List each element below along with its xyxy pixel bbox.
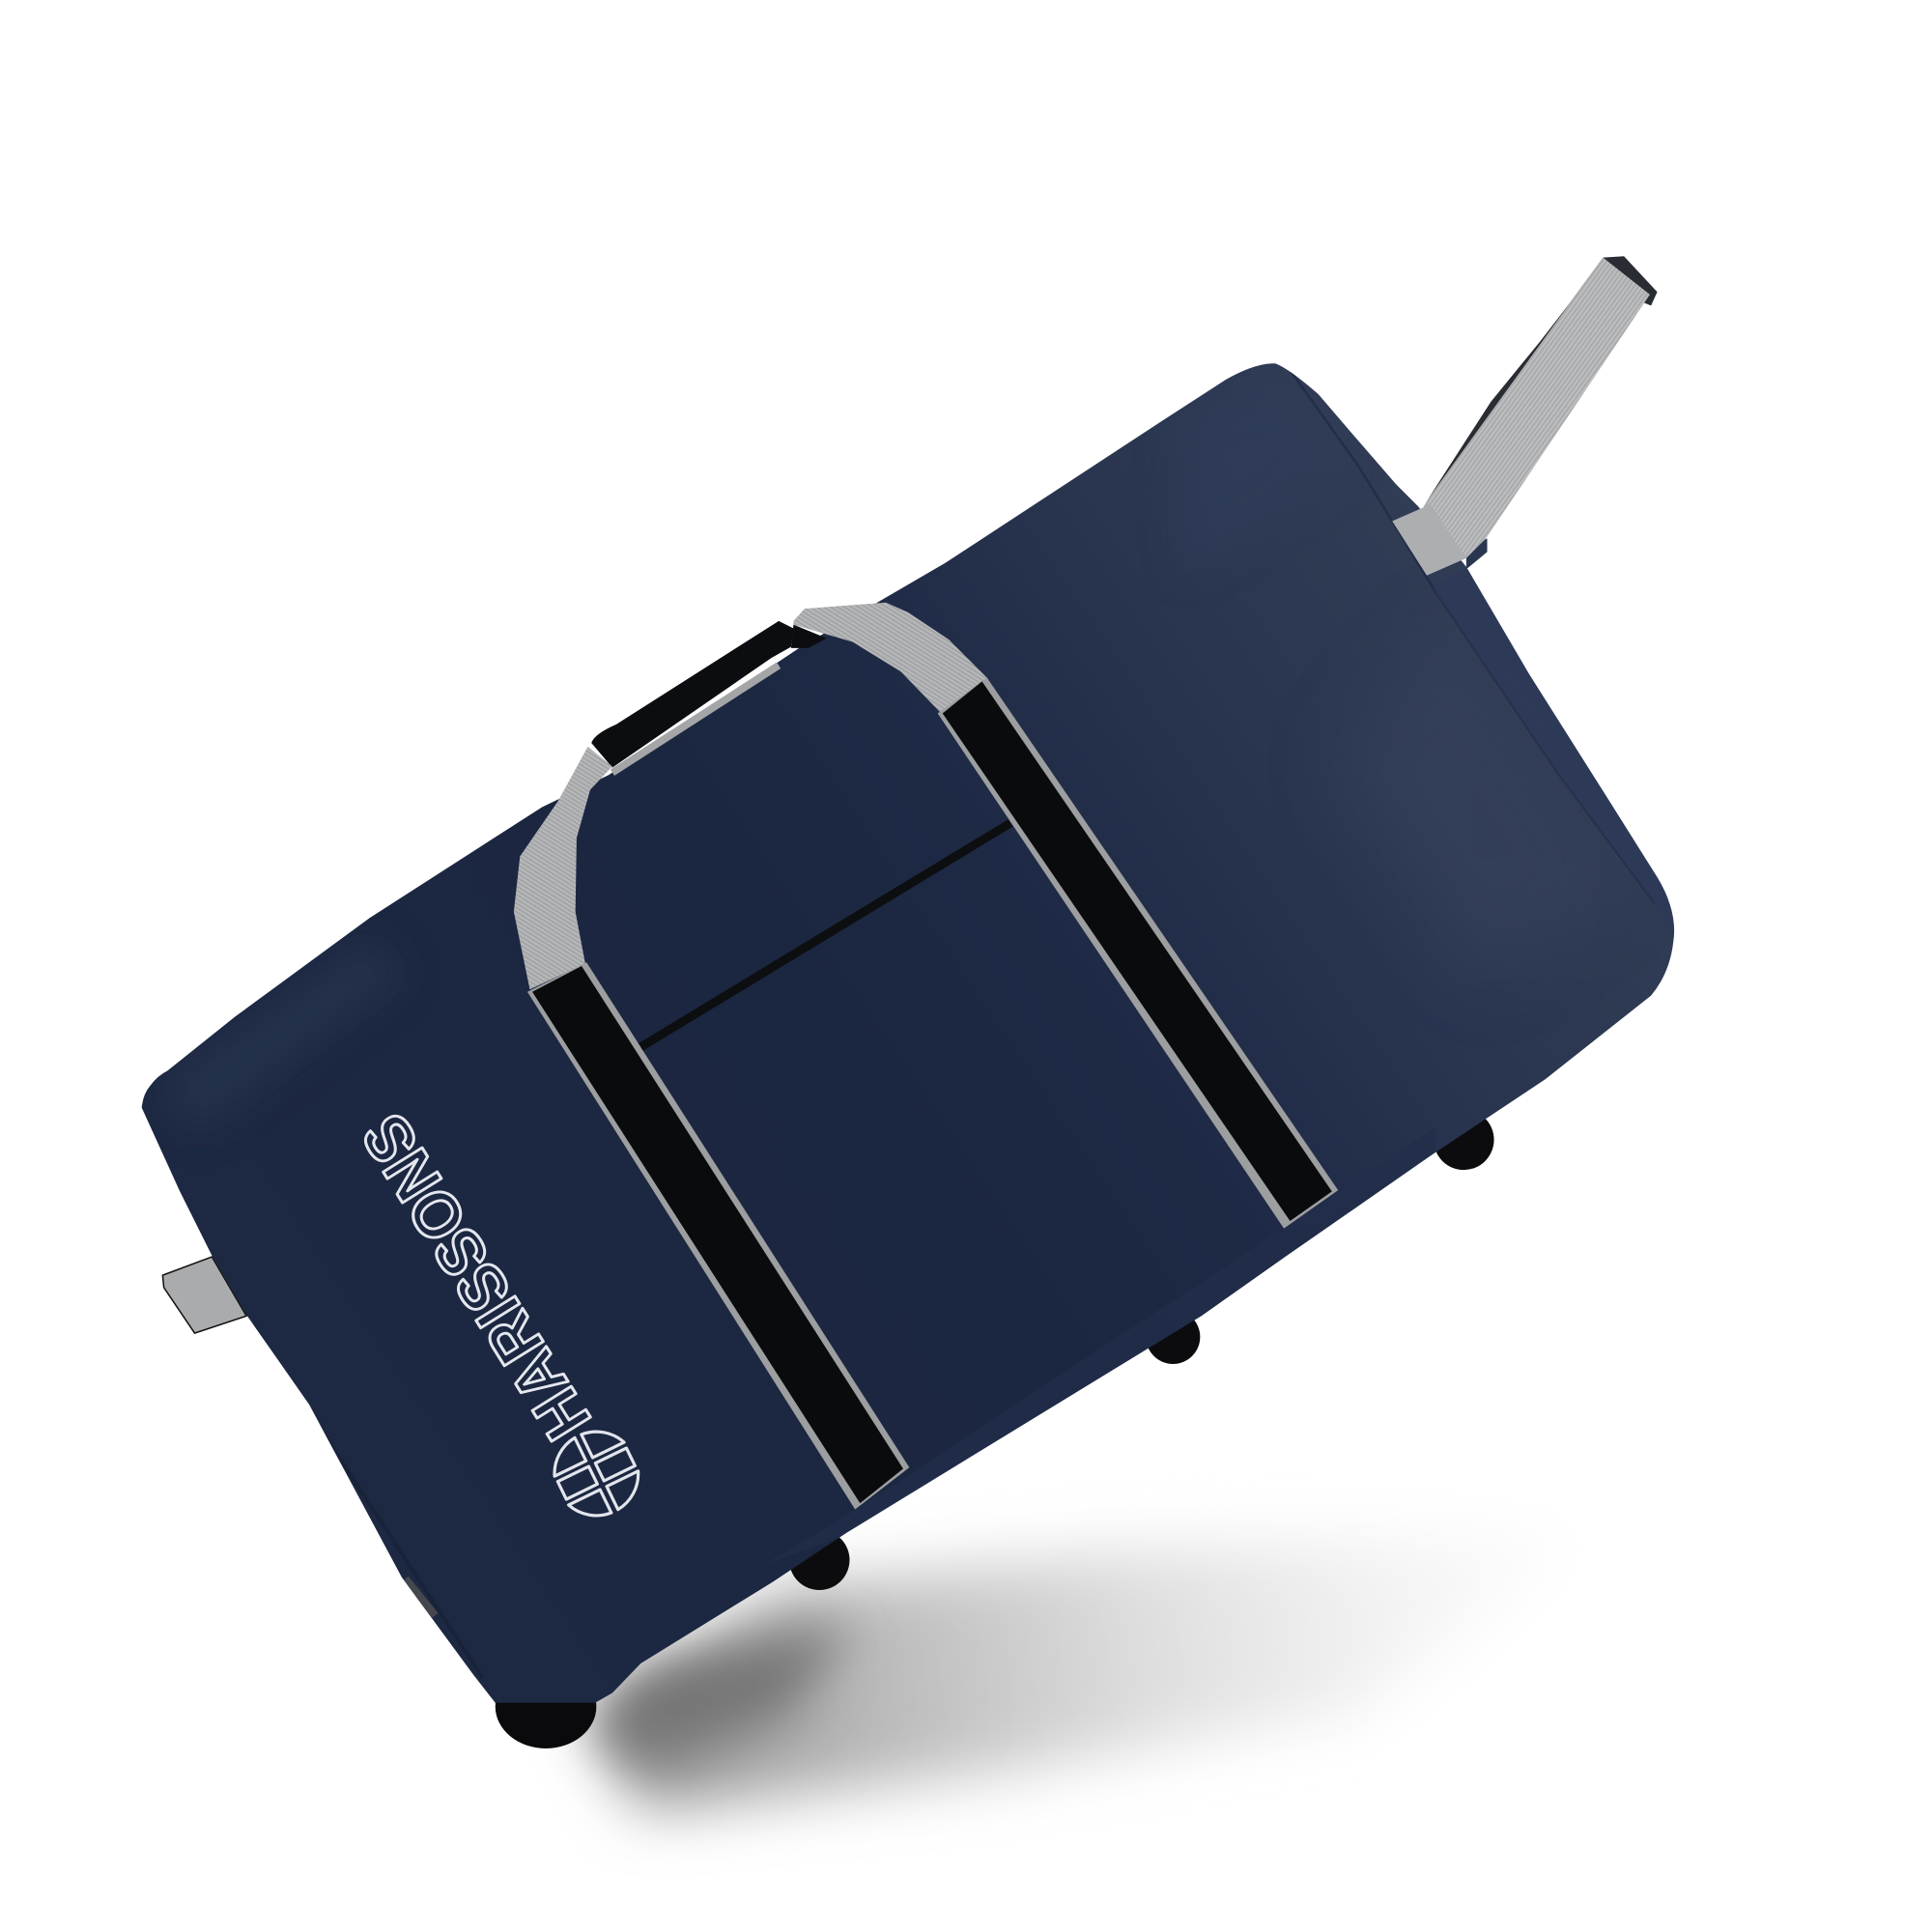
brand wordmark: HARISSONS: [348, 1101, 605, 1453]
lighter end strip: [1434, 569, 1668, 903]
product photo: rolling duffel bag: [141, 256, 1675, 1845]
strap: right webbing, grey: [793, 603, 988, 712]
bottom rim strip: [838, 1152, 1435, 1538]
bag body: [142, 363, 1674, 1703]
sheen: left corner: [156, 953, 365, 1101]
pocket zipper: [639, 823, 1010, 1048]
brand logo mark: [543, 1419, 649, 1528]
sheen: right panel: [1331, 616, 1627, 985]
wheel: front corner: [496, 1664, 596, 1748]
strap: left webbing, grey: [514, 747, 612, 989]
lower dark seam: [252, 1324, 483, 1678]
wheel: second: [789, 1530, 849, 1590]
ground shadow: [585, 1528, 1602, 1811]
tab: top end strap: [1392, 258, 1650, 576]
tab: top end strap shadow: [1428, 256, 1658, 569]
wheel: third: [1434, 1110, 1494, 1170]
tab: bottom end loop: [162, 1257, 246, 1333]
sheen and seams clipped to the bag: [154, 368, 1673, 1678]
strap: right black band with grey piping: [938, 678, 1338, 1229]
handle: padded black grip: [591, 621, 827, 773]
wheel: fourth: [1146, 1310, 1200, 1364]
grey corner seam: [404, 1579, 434, 1616]
end seam fold: [1289, 368, 1655, 903]
sheen: upper end: [1171, 370, 1355, 579]
strap: left black band with grey piping: [527, 962, 909, 1509]
